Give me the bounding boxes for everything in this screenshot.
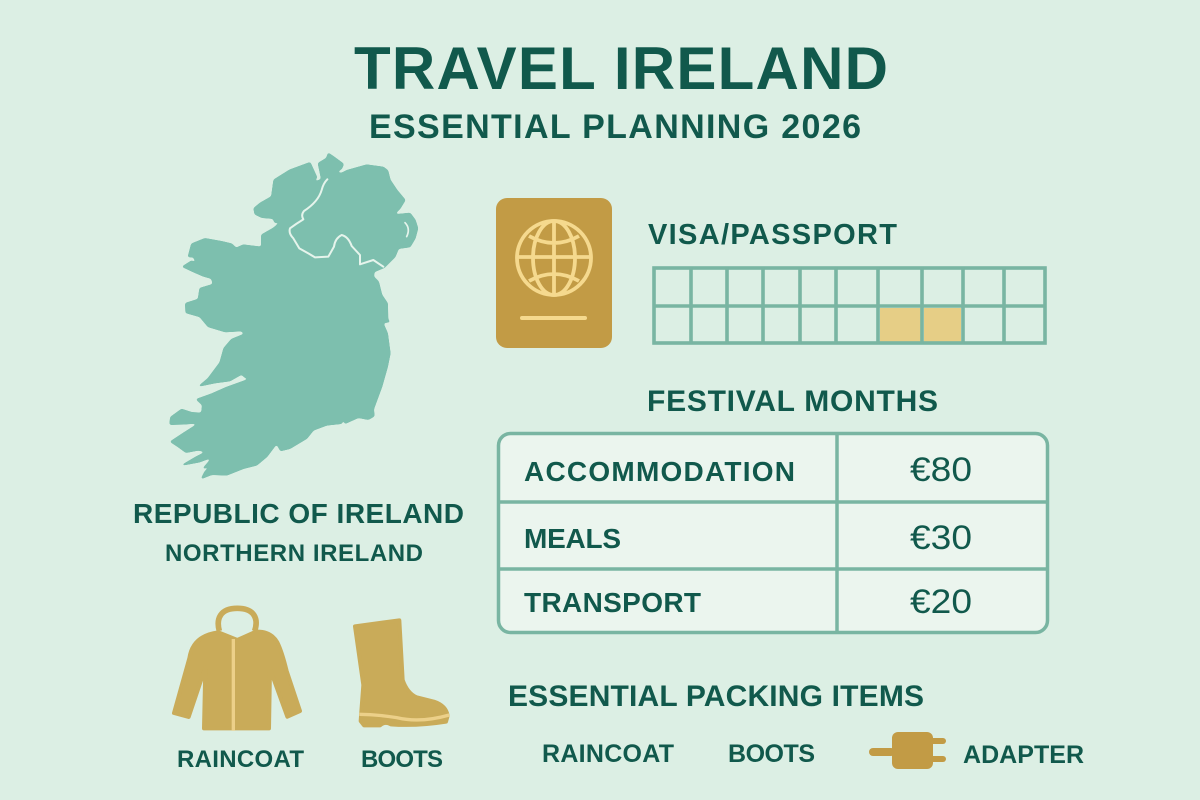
heading: essential packing items: ESSENTIAL PACKING ITEMS [508,680,924,713]
label: Northern Ireland: NORTHERN IRELAND [165,540,423,567]
budget table [498,434,1048,632]
value: transport: €20 [910,583,972,621]
item: raincoat: RAINCOAT [542,740,674,768]
heading: festival months: FESTIVAL MONTHS [647,385,938,418]
subtitle: ESSENTIAL PLANNING 2026 [369,108,861,146]
row: accommodation: ACCOMMODATION [524,456,795,487]
row: transport: TRANSPORT [524,587,701,618]
label: Republic of Ireland: REPUBLIC OF IRELAND [133,498,464,529]
row: meals: MEALS [524,523,621,554]
item: adapter: ADAPTER [963,741,1084,769]
heading: visa/passport: VISA/PASSPORT [648,219,897,251]
label: raincoat: RAINCOAT [177,746,304,773]
value: accommodation: €80 [910,451,972,489]
calendar grid [653,267,1046,344]
icon: passport [496,198,612,348]
icon: raincoat [174,608,300,731]
label: boots: BOOTS [361,746,443,773]
icon: adapter plug [869,732,946,769]
title: TRAVEL IRELAND [354,35,888,102]
value: meals: €30 [910,519,972,557]
item: boots: BOOTS [728,740,815,768]
map of Ireland [170,153,418,478]
icon: boot [355,620,449,725]
